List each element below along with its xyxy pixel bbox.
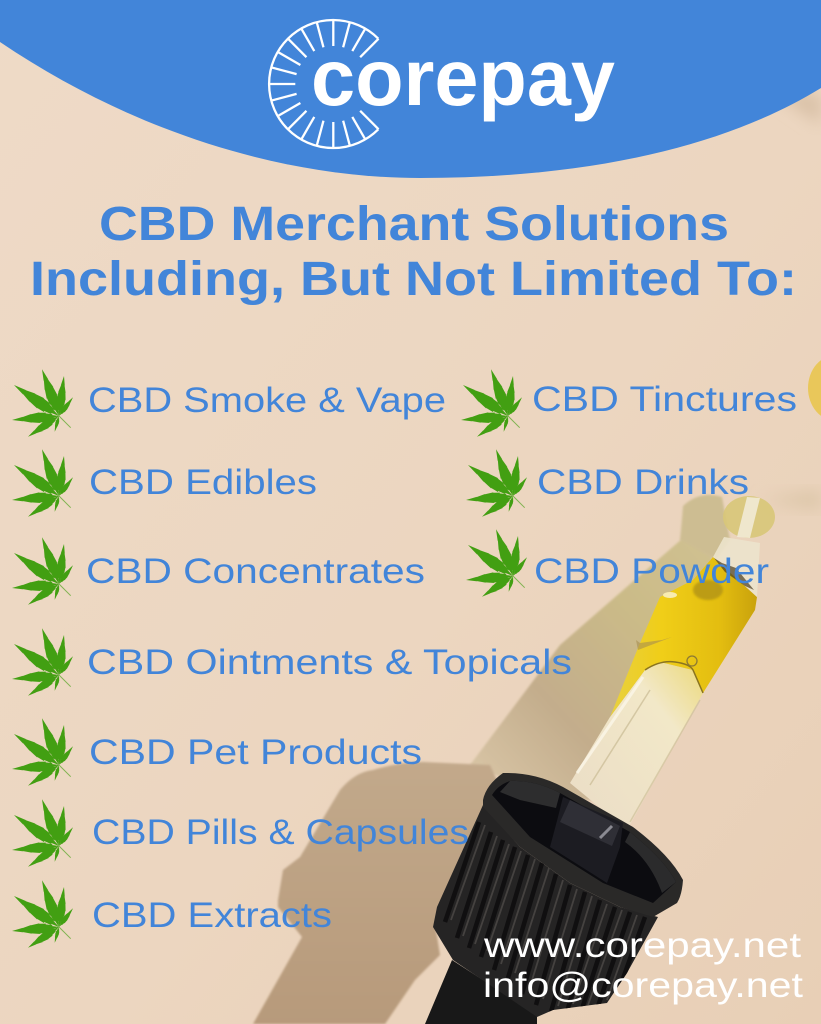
icon: cannabis leaf <box>10 626 75 699</box>
icon: cannabis leaf <box>459 367 524 440</box>
corepay logo <box>269 20 615 148</box>
list item: extracts <box>10 878 332 951</box>
blue header banner <box>0 0 821 178</box>
ribbed body <box>433 805 658 1017</box>
title: CBD Merchant Solutions <box>99 198 729 251</box>
background photo <box>252 91 821 1024</box>
list item: drinks: CBD Drinks <box>537 463 749 502</box>
icon: cannabis leaf <box>10 797 75 870</box>
yellow oil <box>610 557 757 717</box>
list item: powder <box>464 527 769 600</box>
logo sunburst ring <box>269 20 379 148</box>
list item: edibles <box>10 447 317 520</box>
list item: smoke and vape <box>10 367 446 440</box>
icon: cannabis leaf <box>10 878 75 951</box>
icon: cannabis leaf <box>10 535 75 608</box>
glass dropper tube <box>570 662 703 830</box>
droplet shadow <box>680 495 730 560</box>
icon: cannabis leaf <box>464 527 529 600</box>
list item: ointments and topicals: CBD Ointments & Topicals <box>87 643 572 682</box>
list item: smoke and vape: CBD Smoke & Vape <box>88 381 446 420</box>
logo wordmark: corepay <box>311 33 615 122</box>
yellow droplet at right edge <box>808 355 821 421</box>
list item: pills and capsules <box>10 797 469 870</box>
top right soft shadow <box>770 90 821 125</box>
icon: cannabis leaf <box>10 367 75 440</box>
contact details: info@corepay.net <box>483 966 803 1005</box>
dropper shadow band <box>470 538 712 800</box>
tip neck and hanging drop <box>713 537 760 597</box>
list item: extracts: CBD Extracts <box>92 896 332 935</box>
list item: drinks <box>464 447 749 520</box>
cap shadow <box>253 762 520 1024</box>
list item: edibles: CBD Edibles <box>89 463 317 502</box>
icon: cannabis leaf <box>464 447 529 520</box>
black dropper cap <box>425 773 683 1024</box>
list item: pet products: CBD Pet Products <box>89 733 422 772</box>
inner dropper neck <box>550 797 623 883</box>
list item: pills and capsules: CBD Pills & Capsules <box>92 813 469 852</box>
contact details: www.corepay.net <box>483 926 801 965</box>
list item: tinctures <box>459 367 797 440</box>
list item: concentrates <box>10 535 425 608</box>
right side bottle shadow <box>760 490 821 510</box>
list item: concentrates: CBD Concentrates <box>86 552 425 591</box>
list item: tinctures: CBD Tinctures <box>532 380 797 419</box>
list item: ointments and topicals <box>10 626 572 699</box>
title: Including, But Not Limited To: <box>30 253 797 306</box>
cap interior <box>492 781 676 903</box>
icon: cannabis leaf <box>10 447 75 520</box>
bottle stem <box>425 960 537 1024</box>
cap rim <box>483 773 683 917</box>
title <box>30 198 797 306</box>
contact details <box>483 926 803 1005</box>
list item: powder: CBD Powder <box>534 552 769 591</box>
icon: cannabis leaf <box>10 716 75 789</box>
list item: pet products <box>10 716 422 789</box>
